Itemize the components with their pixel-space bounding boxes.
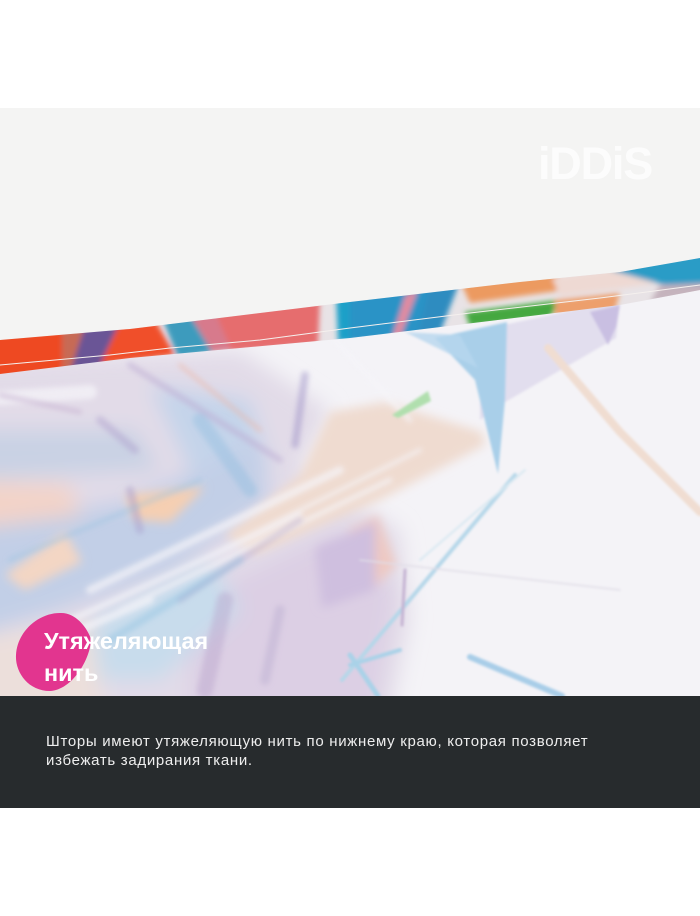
peach brush sweep (5, 402, 485, 608)
description text: избежать задирания ткани. (46, 752, 253, 769)
thin diagonal lines (342, 348, 700, 696)
heading: Утяжеляющая (44, 628, 208, 654)
pink blob (16, 613, 91, 691)
fabric panel (0, 305, 700, 696)
hem stitching (0, 285, 700, 365)
white brush strokes (0, 385, 422, 630)
description text (46, 733, 588, 769)
description text: Шторы имеют утяжеляющую нить по нижнему краю, которая позволяет (46, 733, 588, 750)
photo: curtain fabric with hem (0, 108, 700, 696)
purple and blue strokes (0, 365, 305, 690)
heading: нить (44, 660, 98, 686)
left painted wash (0, 348, 413, 696)
hem strip (0, 258, 700, 374)
text band (0, 696, 700, 808)
background wall (0, 108, 700, 348)
heading (44, 628, 208, 686)
blue shard and lilac facet (392, 300, 620, 474)
logo: IDDIS: iDDiS (538, 138, 652, 189)
